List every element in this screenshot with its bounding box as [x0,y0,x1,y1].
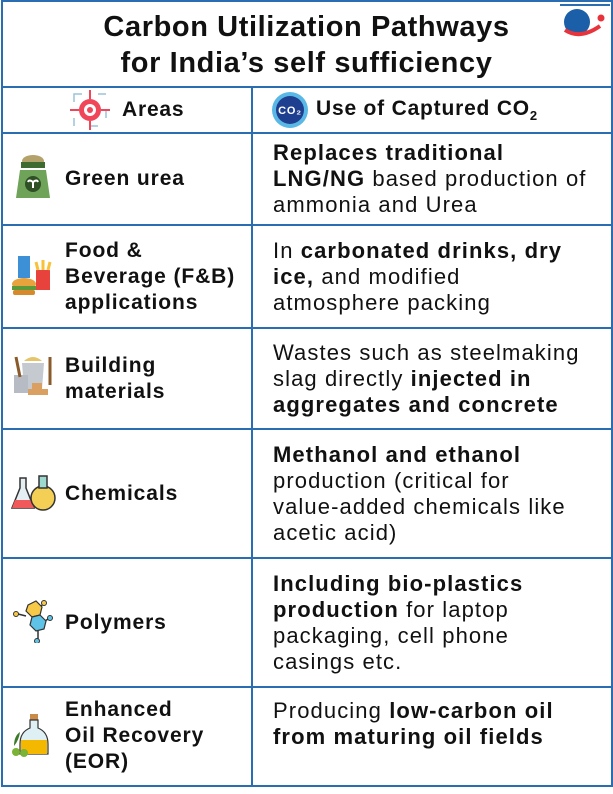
row: EOR: (EOR) [65,750,129,773]
row: Building materials: materials [65,380,165,402]
header: Areas [70,90,184,130]
icon: urea bag [16,155,50,198]
icon: flasks [10,475,56,511]
row: Building materials: aggregates and concrete [273,392,559,416]
row: Chemicals [10,442,566,544]
row: Polymers: packaging, cell phone [273,622,509,648]
icon: target [70,90,110,130]
row: Chemicals: production (critical for [273,468,510,492]
icon: CO2 bubble: CO₂ [278,105,302,117]
row: F&B: In carbonated drinks, dry [273,238,562,262]
row: Polymers: casings etc. [273,648,402,674]
row: Green urea: LNG/NG based production of [273,166,587,191]
icon: logo [560,4,610,36]
title: for India’s self sufficiency [121,47,492,79]
icon: molecule [13,600,53,643]
icon: CO2 bubble [272,92,308,128]
row: Building materials: Building [65,354,156,376]
row: F&B: applications [65,290,198,314]
row: EOR: Producing low-carbon oil [273,698,554,723]
icon: building materials [14,356,52,395]
row: Polymers: production for laptop [273,596,509,622]
row: Green urea: ammonia and Urea [273,192,478,217]
row: Polymers: Including bio-plastics [273,570,523,596]
row: F&B: Beverage (F&B) [65,264,235,288]
row: F&B: Food & [65,238,143,262]
header: Areas: Areas [122,98,184,121]
row: Building materials: slag directly injected in [273,366,532,390]
row: Chemicals: acetic acid) [273,520,397,544]
header: Use of Captured CO2: Use of Captured CO2 [316,97,538,123]
row: F&B [12,238,562,314]
row: EOR: Oil Recovery [65,724,204,747]
row: Green urea: Replaces traditional [273,140,504,165]
row: Chemicals: Methanol and ethanol [273,442,521,466]
row: Chemicals: value-added chemicals like [273,494,566,518]
icon: food [12,256,52,295]
row: F&B: ice, and modified [273,264,460,288]
row: EOR: from maturing oil fields [273,724,544,749]
title [103,11,510,79]
row: EOR [12,698,554,773]
row: Building materials [14,340,580,416]
icon: oil bottle [12,714,49,757]
row: EOR: Enhanced [65,698,173,721]
row: Green urea [16,140,587,217]
title: Carbon Utilization Pathways [103,11,510,43]
row: Building materials: Wastes such as steelmaking [273,340,580,364]
header: Use of Captured CO2 [272,92,538,128]
row: F&B: atmosphere packing [273,290,491,314]
row: Green urea: Green urea [65,167,185,190]
row: Polymers: Polymers [65,610,167,634]
row: Chemicals: Chemicals [65,482,178,504]
row: Polymers [13,570,523,674]
